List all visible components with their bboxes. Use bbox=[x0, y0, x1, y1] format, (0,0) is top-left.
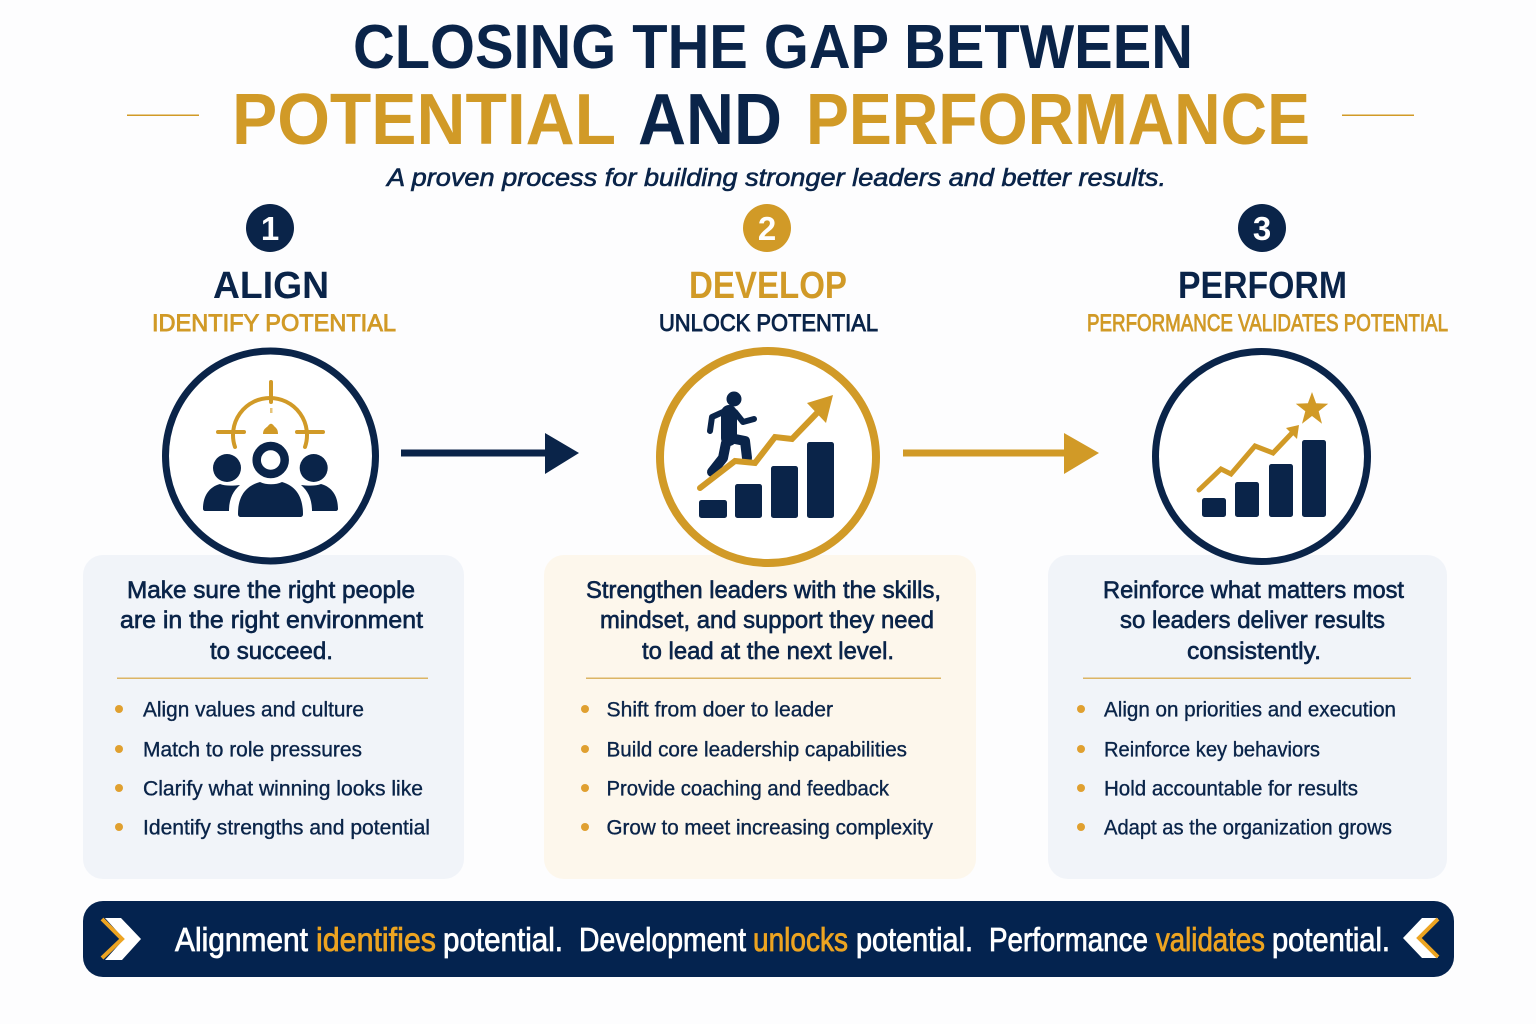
step 3 heading bbox=[1087, 204, 1448, 337]
icon: bars with star bbox=[1156, 352, 1368, 562]
icon: people with target bbox=[166, 351, 376, 561]
step 3 heading: PERFORM bbox=[1178, 265, 1347, 307]
align bullet list: Identify strengths and potential bbox=[143, 816, 430, 840]
align description bbox=[120, 577, 423, 665]
perform description: consistently. bbox=[1187, 638, 1321, 665]
step 1 heading: IDENTIFY POTENTIAL bbox=[152, 310, 396, 337]
banner message: Alignment bbox=[175, 921, 308, 958]
title: PERFORMANCE bbox=[806, 80, 1310, 160]
number badge 3: 3 bbox=[1253, 210, 1271, 247]
develop description: to lead at the next level. bbox=[642, 638, 894, 665]
banner message: identifies bbox=[316, 921, 436, 958]
banner message: Performance bbox=[989, 921, 1148, 958]
align bullet list bbox=[115, 698, 430, 840]
develop bullet list bbox=[581, 698, 933, 840]
step 1 heading bbox=[152, 204, 396, 337]
number badge 3 bbox=[1238, 204, 1286, 252]
number badge 1: 1 bbox=[261, 210, 279, 247]
align bullet list: Clarify what winning looks like bbox=[143, 778, 423, 800]
title bbox=[232, 13, 1310, 160]
perform description bbox=[1103, 577, 1404, 665]
step 2 heading: UNLOCK POTENTIAL bbox=[659, 310, 878, 337]
icon: right chevron bbox=[1403, 918, 1438, 958]
perform bullet list: Hold accountable for results bbox=[1104, 778, 1358, 800]
banner message bbox=[175, 921, 1390, 958]
perform bullet list: Adapt as the organization grows bbox=[1104, 816, 1392, 840]
arrow: align to develop bbox=[401, 433, 579, 474]
icon: runner climbing bars bbox=[660, 351, 876, 563]
banner message: potential. bbox=[443, 921, 563, 958]
panel: align bbox=[83, 555, 464, 879]
icon: left chevron bbox=[102, 918, 141, 960]
develop bullet list: Provide coaching and feedback bbox=[606, 778, 889, 800]
perform description: Reinforce what matters most bbox=[1103, 577, 1404, 604]
develop description bbox=[586, 577, 941, 665]
panel: perform bbox=[1048, 555, 1447, 879]
banner message: Development bbox=[579, 921, 746, 958]
banner message: potential. bbox=[1272, 921, 1390, 958]
step 2 heading: DEVELOP bbox=[689, 265, 847, 307]
banner message: validates bbox=[1156, 921, 1265, 958]
subtitle: A proven process for building stronger leaders and better results. bbox=[385, 164, 1166, 192]
align bullet list: Align values and culture bbox=[143, 698, 364, 722]
perform bullet list: Reinforce key behaviors bbox=[1104, 738, 1320, 762]
step 2 heading bbox=[659, 204, 878, 337]
perform bullet list bbox=[1077, 698, 1396, 840]
title: CLOSING THE GAP BETWEEN bbox=[353, 13, 1193, 82]
panel: develop bbox=[544, 555, 976, 879]
perform description: so leaders deliver results bbox=[1120, 607, 1385, 634]
banner message: unlocks bbox=[753, 921, 848, 958]
develop description: Strengthen leaders with the skills, bbox=[586, 577, 941, 604]
summary banner bbox=[83, 901, 1454, 977]
align description: Make sure the right people bbox=[127, 577, 415, 604]
develop bullet list: Build core leadership capabilities bbox=[606, 738, 907, 762]
develop description: mindset, and support they need bbox=[600, 607, 934, 634]
number badge 2: 2 bbox=[758, 210, 776, 247]
number badge 2 bbox=[743, 204, 791, 252]
develop bullet list: Shift from doer to leader bbox=[606, 698, 833, 722]
step 1 heading: ALIGN bbox=[213, 265, 329, 307]
align description: to succeed. bbox=[210, 638, 333, 665]
perform bullet list: Align on priorities and execution bbox=[1104, 698, 1396, 722]
title: AND bbox=[638, 80, 782, 160]
step 3 heading: PERFORMANCE VALIDATES POTENTIAL bbox=[1087, 310, 1448, 337]
title: POTENTIAL bbox=[232, 80, 616, 160]
number badge 1 bbox=[246, 204, 294, 252]
arrow: develop to perform bbox=[903, 433, 1099, 474]
align description: are in the right environment bbox=[120, 607, 423, 634]
banner message: potential. bbox=[856, 921, 973, 958]
align bullet list: Match to role pressures bbox=[143, 738, 362, 762]
develop bullet list: Grow to meet increasing complexity bbox=[606, 816, 933, 840]
